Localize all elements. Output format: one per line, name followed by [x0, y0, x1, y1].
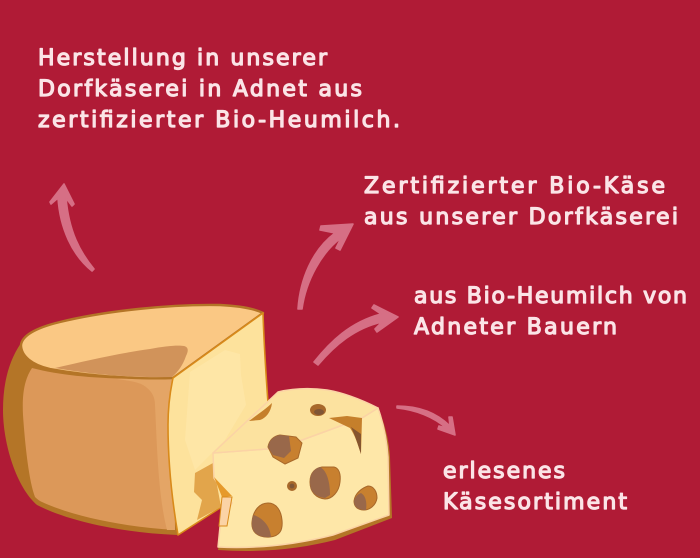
illustration: cheese wedge: [213, 389, 392, 551]
wedge front face: [213, 408, 389, 547]
notch: [214, 477, 232, 497]
wheel side face: [23, 368, 175, 530]
text: certified organic cheese: Zertifizierter Bio-Käse: [364, 174, 665, 199]
hole: tiny dot: [287, 481, 297, 491]
wheel rind: [3, 343, 177, 535]
text: cheese range: erlesenes: [443, 459, 565, 484]
hole: top crescent: [249, 403, 272, 421]
hole: centre left: [268, 435, 302, 464]
text: production: zertifizierter Bio-Heumilch.: [38, 108, 400, 133]
hole: bottom left: [252, 503, 282, 537]
text: production: Herstellung in unserer: [38, 46, 328, 71]
text: certified organic cheese: [364, 174, 678, 230]
wedge rim: [218, 407, 392, 551]
text: cheese range: Käsesortiment: [443, 490, 627, 515]
arrow: to certified cheese: [298, 224, 353, 309]
hole: centre: [310, 467, 340, 499]
arrow: top left: [50, 184, 94, 271]
arrow: to cheese range: [397, 406, 455, 435]
text: production: Dorfkäserei in Adnet aus: [38, 77, 362, 102]
wedge top face: [213, 389, 378, 453]
cut notch shadow: [194, 463, 221, 520]
text: certified organic cheese: aus unserer Dorfkäserei: [364, 205, 678, 230]
text: production: [38, 46, 400, 133]
illustration: cheese wheel: [3, 305, 268, 535]
hole: small top: [310, 404, 326, 416]
wheel top shadow: [55, 346, 188, 377]
wheel side highlight: [117, 378, 175, 530]
arrow: to hay milk: [314, 305, 398, 365]
text: hay milk: Adneter Bauern: [414, 315, 617, 340]
hole: right: [354, 486, 377, 510]
text: cheese range: [443, 459, 627, 515]
text: hay milk: [414, 284, 687, 340]
wheel top: [21, 305, 263, 378]
text: hay milk: aus Bio-Heumilch von: [414, 284, 687, 309]
hole: triangular crack: [329, 416, 362, 454]
wheel cut face: [168, 313, 268, 535]
cut face highlight: [185, 350, 246, 470]
